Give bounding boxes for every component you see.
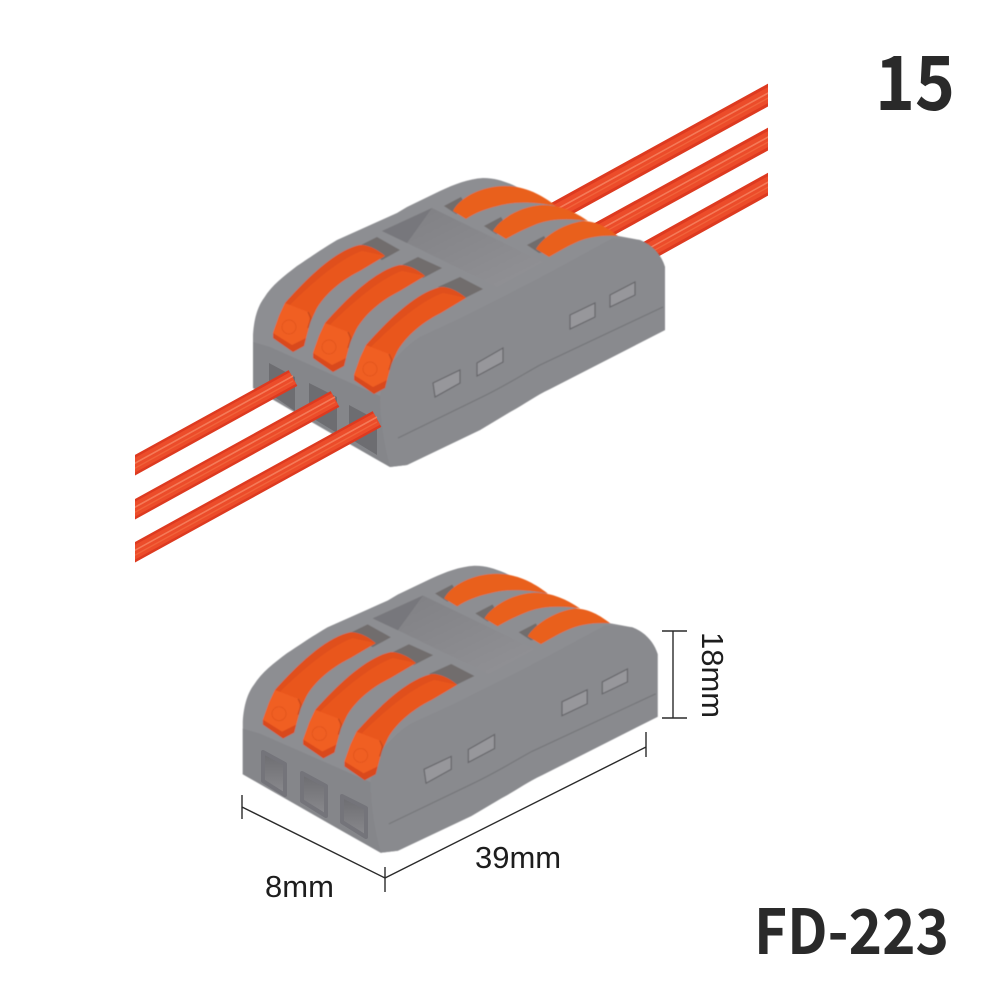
upper connector body xyxy=(253,178,665,467)
dimension: 39mm: 39mm xyxy=(475,840,561,875)
dimension: 8mm xyxy=(242,795,385,904)
upper wire holes xyxy=(269,363,377,455)
front red wires xyxy=(110,376,377,569)
number label: 15: 15 xyxy=(875,23,955,132)
model label: FD-223: FD-223 xyxy=(754,882,949,972)
lower connector xyxy=(243,566,658,853)
upper connector with wires xyxy=(110,178,665,569)
rear red wires of upper connector xyxy=(551,84,768,256)
dimension: 39mm xyxy=(385,732,646,878)
dimension: 8mm: 8mm xyxy=(265,869,334,904)
dimension: 18mm xyxy=(662,631,730,718)
lower connector body xyxy=(243,566,658,853)
dimension: 18mm: 18mm xyxy=(695,632,730,718)
lower wire holes xyxy=(263,752,366,837)
